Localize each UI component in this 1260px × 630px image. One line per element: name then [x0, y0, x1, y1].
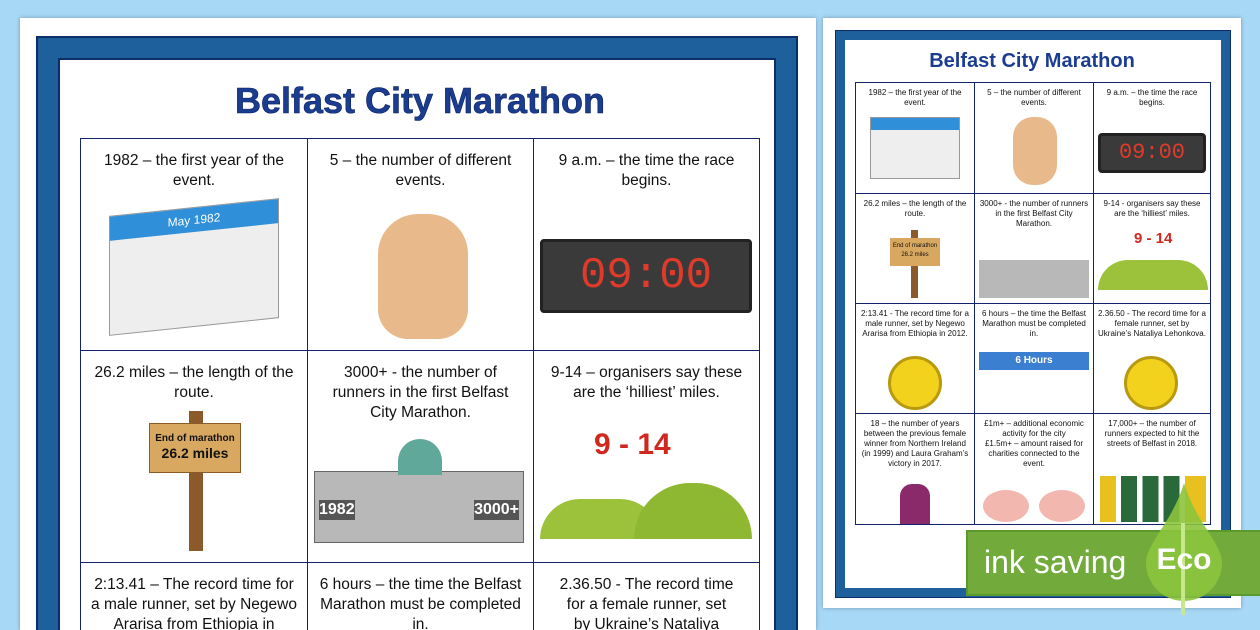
cell: 26.2	[80, 350, 308, 563]
cell: 26.2: route.	[174, 384, 214, 401]
grid	[855, 82, 1211, 525]
cell: 9-14: 9-14 – organisers say these	[551, 364, 742, 381]
icon: hills: 9 - 14	[594, 428, 671, 461]
grid: £1.5m+ – amount raised for charities connected to the event.	[985, 439, 1083, 468]
title: Belfast City Marathon	[929, 50, 1135, 72]
cell: 2:13.41	[80, 562, 308, 630]
icon: hand	[378, 214, 468, 339]
grid: 6 Hours	[1015, 355, 1053, 366]
icon: digital clock	[540, 239, 752, 313]
grid: £1m+ – additional economic activity for the city	[984, 419, 1084, 438]
cell: 5: 5 – the number of different	[330, 152, 511, 169]
cell: 9-14	[533, 350, 760, 563]
cell: 1982	[80, 138, 308, 351]
cell: 26.2: 26.2 miles	[162, 445, 228, 461]
cell: 9am	[533, 138, 760, 351]
grid: 1982 – the first year of the event.	[869, 88, 961, 107]
cell: 3000: runners in the first Belfast	[333, 384, 508, 401]
cell: 5: events.	[396, 172, 445, 189]
grid: 5 – the number of different events.	[987, 88, 1081, 107]
grid: 2:13.41 - The record time for a male runner, set by Negewo Ararisa from Ethiopia in 2012.	[861, 309, 969, 338]
grid: End of marathon	[893, 243, 937, 249]
cell: 9am: 9 a.m. – the time the race	[559, 152, 734, 169]
cell: 26.2: End of marathon	[155, 433, 235, 444]
cell: 5	[307, 138, 534, 351]
panel: right poster	[823, 18, 1241, 608]
grid: 3000+ - the number of runners in the first Belfast City Marathon.	[980, 199, 1088, 228]
cell: 2.36.50: for a female runner, set	[567, 596, 726, 613]
cell: 9am: begins.	[622, 172, 671, 189]
title: Belfast City Marathon	[235, 80, 605, 121]
grid: 17,000+ – the number of runners expected to hit the streets of Belfast in 2018.	[1105, 419, 1199, 448]
cell: 6 hours: Marathon must be completed	[320, 596, 521, 613]
cell: 1982: 1982 – the first year of the	[104, 152, 284, 169]
icon: digital clock: 09:00	[580, 251, 712, 301]
grid: 9 a.m. – the time the race begins.	[1107, 88, 1197, 107]
cell: 6 hours	[307, 562, 534, 630]
grid	[80, 138, 760, 630]
grid: 9 - 14	[1134, 230, 1172, 247]
grid: 09:00	[1119, 140, 1185, 165]
icon: eco leaf	[1146, 483, 1222, 615]
grid: 18 – the number of years between the previous female winner from Northern Ireland (in 1999) and Laura Graham’s victory in 2017.	[862, 419, 968, 468]
icon: eco leaf: Eco	[1156, 543, 1212, 576]
panel: left poster	[20, 18, 816, 630]
cell: 3000	[307, 350, 534, 563]
icon: city hall: 1982	[319, 501, 355, 518]
cell: 3000: 3000+ - the number of	[344, 364, 497, 381]
cell: 2.36.50	[533, 562, 760, 630]
cell: 3000: City Marathon.	[370, 404, 471, 421]
grid: 9-14 - organisers say these are the ‘hilliest’ miles.	[1104, 199, 1200, 218]
badge: ink saving eco: ink saving	[984, 544, 1126, 580]
icon: city hall: 3000+	[474, 501, 519, 518]
frame	[36, 36, 798, 630]
cell: 26.2: 26.2 miles – the length of the	[94, 364, 294, 381]
icon: calendar	[109, 198, 279, 336]
grid: 6 hours – the time the Belfast Marathon must be completed in.	[982, 309, 1086, 338]
icon: city hall	[314, 471, 524, 543]
grid: 26.2 miles – the length of the route.	[864, 199, 966, 218]
icon: calendar: May 1982	[168, 210, 220, 230]
badge: ink saving eco	[966, 530, 1260, 596]
grid: 2.36.50 - The record time for a female runner, set by Ukraine’s Nataliya Lehonkova.	[1098, 309, 1206, 338]
cell: 2.36.50: 2.36.50 - The record time	[560, 576, 733, 593]
cell: 9-14: are the ‘hilliest’ miles.	[573, 384, 720, 401]
grid: 26.2 miles	[901, 252, 929, 258]
cell: 6 hours: 6 hours – the time the Belfast	[320, 576, 521, 593]
cell: 2:13.41: 2:13.41 – The record time for	[94, 576, 294, 593]
cell: 1982: event.	[173, 172, 215, 189]
icon: sign post	[189, 411, 203, 551]
cell: 2:13.41: a male runner, set by Negewo	[91, 596, 297, 613]
